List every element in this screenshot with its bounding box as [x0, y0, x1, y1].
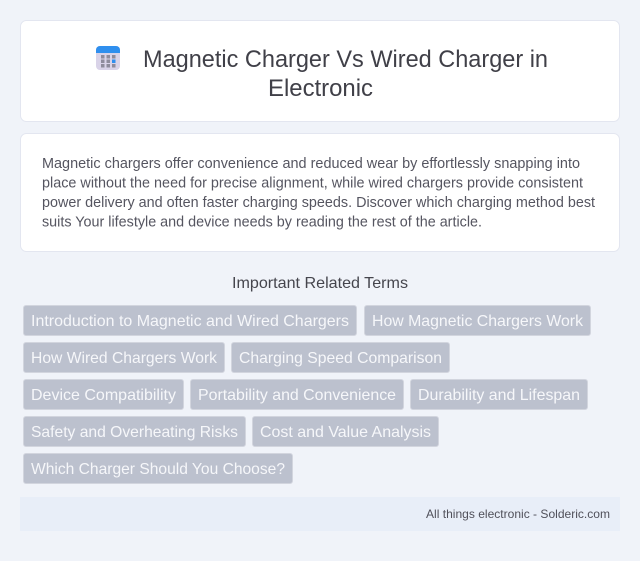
tag: cost and value analysis — [252, 416, 438, 446]
tag: cost and value analysis: Cost and Value Analysis — [260, 424, 431, 441]
tag: which charger should you choose — [24, 454, 292, 484]
title — [143, 46, 548, 102]
text block: description: suits Your lifestyle and device needs by reading the rest of the article. — [42, 214, 482, 230]
tag: device compatibility: Device Compatibility — [31, 387, 176, 404]
tag: introduction: Introduction to Magnetic and Wired Chargers — [31, 313, 349, 330]
panel: title header — [20, 20, 620, 122]
text block: description: power delivery and often faster charging speeds. Discover which charging method best — [42, 195, 595, 211]
tag: safety and overheating risks — [24, 416, 246, 446]
tag: how wired chargers work: How Wired Chargers Work — [31, 350, 218, 367]
tag: device compatibility — [24, 380, 184, 410]
tag: charging speed comparison — [232, 342, 450, 372]
tag: portability and convenience — [190, 380, 404, 410]
icon: calendar — [96, 46, 120, 70]
panel: description — [20, 134, 620, 252]
tag: how magnetic chargers work: How Magnetic Chargers Work — [372, 313, 584, 330]
title: Electronic — [268, 75, 373, 102]
tag: portability and convenience: Portability and Convenience — [198, 387, 396, 404]
footer: All things electronic - Solderic.com — [426, 507, 610, 521]
text block: description: place without the need for precise alignment, while wired chargers provide consistent — [42, 176, 583, 192]
tag: how wired chargers work — [24, 342, 224, 372]
tag: charging speed comparison: Charging Speed Comparison — [239, 350, 442, 367]
tag: durability and lifespan — [410, 380, 588, 410]
tag: durability and lifespan: Durability and Lifespan — [418, 387, 580, 404]
tag: which charger should you choose: Which Charger Should You Choose? — [31, 461, 285, 478]
footer — [20, 497, 620, 531]
tag: safety and overheating risks: Safety and Overheating Risks — [31, 424, 238, 441]
tag: introduction — [24, 306, 356, 336]
text block: description: Magnetic chargers offer convenience and reduced wear by effortlessly snapping into — [42, 156, 580, 172]
text block: description — [42, 156, 595, 230]
panel: related terms tags — [24, 306, 590, 484]
title: Magnetic Charger Vs Wired Charger in — [143, 46, 548, 73]
heading: important related terms: Important Related Terms — [232, 275, 408, 292]
tag: how magnetic chargers work — [364, 306, 590, 336]
